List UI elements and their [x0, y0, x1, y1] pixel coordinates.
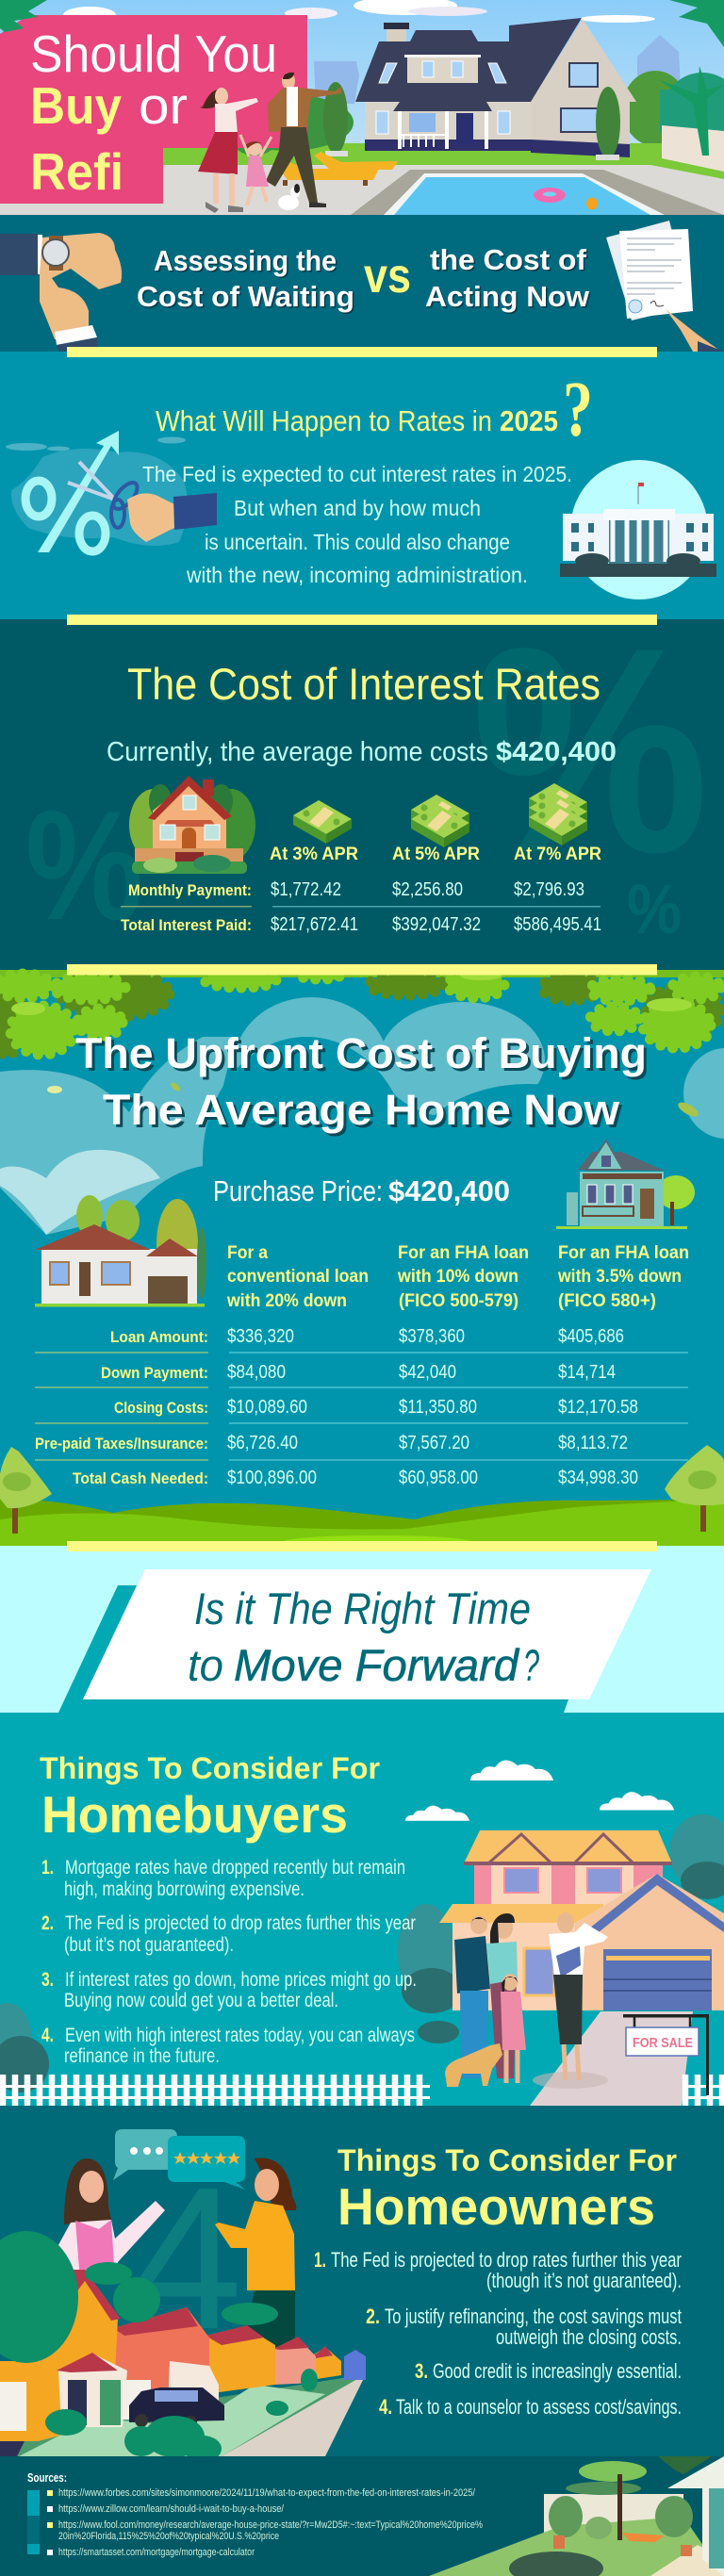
- list: homeowner points: [314, 2248, 682, 2419]
- watermark: percent signs: [25, 586, 709, 952]
- table values: $378,360: [399, 1326, 465, 1347]
- section: sources: [0, 2456, 724, 2576]
- table values: $6,726.40: [227, 1433, 298, 1453]
- heading: homebuyers: Homebuyers: [41, 1785, 348, 1844]
- house: [355, 18, 636, 157]
- loungers: [273, 152, 398, 186]
- list: homebuyer points: 1.: [41, 1857, 54, 1879]
- row labels: Pre-paid Taxes/Insurance:: [35, 1435, 208, 1452]
- table values: $8,113.72: [558, 1433, 628, 1453]
- banner panel: [83, 1569, 651, 1699]
- heading: the cost of acting now: Acting Now: [425, 280, 590, 313]
- source links: [58, 2487, 483, 2558]
- subheading: average home cost: Currently, the average home costs: [107, 737, 488, 767]
- list: homebuyer points: [41, 1857, 417, 2067]
- table: upfront cost: [35, 1243, 689, 1488]
- title text: Should You: Should You: [30, 25, 277, 83]
- section: hero scene: [0, 0, 724, 215]
- icon: hand with watch: [0, 233, 122, 352]
- icon: blue two-storey house: [556, 1140, 695, 1229]
- heading: the upfront cost: The Upfront Cost of Buying: [78, 1032, 650, 1080]
- title text: Buy: Buy: [30, 76, 122, 135]
- car: [129, 2387, 224, 2429]
- heading: the upfront cost: The Average Home Now: [103, 1086, 620, 1134]
- list: homebuyer points: If interest rates go down, home prices might go up.: [65, 1969, 417, 1991]
- list: homebuyer points: The Fed is projected to drop rates further this year: [65, 1912, 416, 1934]
- row labels: Closing Costs:: [114, 1399, 208, 1417]
- list: homeowner points: 4.: [379, 2395, 392, 2419]
- table headers: At 7% APR: [514, 845, 601, 864]
- row: total interest paid: Total Interest Paid:: [121, 916, 252, 934]
- icon: house with trees: [129, 776, 255, 874]
- family and agent: [445, 1912, 608, 2089]
- subheading: purchase price: [213, 1174, 510, 1207]
- fence: [0, 2075, 724, 2106]
- table values: [227, 1326, 638, 1488]
- list: homebuyer points: refinance in the future.: [64, 2045, 220, 2067]
- decorative side bar: [27, 2490, 40, 2554]
- section: homebuyers: [0, 1713, 724, 2106]
- heading: things to consider: Things To Consider For: [337, 2143, 677, 2177]
- list: homebuyer points: (but it’s not guaranteed).: [64, 1934, 234, 1956]
- section: upfront cost of buying: [0, 970, 724, 1549]
- list: homeowner points: 3.: [415, 2359, 428, 2383]
- icon: signed documents: [606, 221, 724, 352]
- table headers: [270, 845, 601, 864]
- banner text: [188, 1583, 539, 1690]
- heading: the upfront cost: [75, 1029, 650, 1137]
- table values: $10,089.60: [227, 1397, 307, 1418]
- heading: assessing the: Assessing the: [154, 244, 337, 277]
- source links: https://smartasset.com/mortgage/mortgage-calculator: [58, 2547, 255, 2558]
- heading: the cost of acting now: Acting Now: [426, 281, 591, 315]
- heading: the cost of acting now: the Cost of: [430, 243, 587, 276]
- list: homebuyer points: high, making borrowing expensive.: [64, 1879, 304, 1900]
- list: homeowner points: 1.: [314, 2248, 326, 2272]
- heading: the cost of acting now: the Cost of: [432, 245, 588, 277]
- table values: $84,080: [227, 1362, 286, 1383]
- column headers: For an FHA loan: [558, 1243, 689, 1263]
- column headers: [226, 1243, 689, 1311]
- title text: Refi: Refi: [30, 142, 123, 201]
- heading: assessing the: Cost of Waiting: [137, 280, 354, 313]
- column headers: conventional loan: [227, 1267, 369, 1287]
- table headers: At 5% APR: [392, 845, 480, 864]
- watermark: percent signs: %: [627, 870, 682, 948]
- watermark: number 4: 4: [132, 2144, 242, 2371]
- for sale sign: [623, 2014, 709, 2095]
- near houses: [0, 2270, 219, 2441]
- source bullets: [47, 2490, 53, 2555]
- list: homebuyer points: 4.: [41, 2025, 54, 2046]
- table values: $405,686: [558, 1326, 624, 1347]
- section: homeowners: [0, 2106, 724, 2462]
- row labels: [35, 1328, 208, 1487]
- column headers: (FICO 580+): [558, 1291, 656, 1311]
- banner text: to: [188, 1640, 223, 1690]
- watermark: percent signs: %: [471, 586, 709, 913]
- body text: rates paragraph: [142, 462, 572, 587]
- list: homeowner points: 2.: [366, 2305, 380, 2328]
- row: monthly payment: [128, 879, 584, 900]
- section: what will happen to rates: [0, 352, 724, 619]
- palm leaves: [0, 0, 724, 156]
- bushes: [0, 1814, 724, 2092]
- illustration: for sale house: [439, 1830, 724, 2106]
- icon: white house with garage: [35, 1195, 206, 1306]
- pink title panel: [0, 15, 307, 204]
- heading: things to consider: Things To Consider For: [40, 1751, 380, 1785]
- body text: rates paragraph: But when and by how much: [234, 496, 481, 520]
- subheading: purchase price: $420,400: [388, 1174, 510, 1207]
- for sale sign: FOR SALE: [633, 2035, 693, 2051]
- banner shadow shape: [58, 1585, 568, 1713]
- table values: $7,567.20: [399, 1433, 469, 1453]
- table: interest rate comparison: [121, 845, 601, 935]
- banner text: ?: [523, 1640, 539, 1690]
- row labels: Loan Amount:: [110, 1328, 208, 1346]
- subheading: purchase price: Purchase Price:: [213, 1174, 383, 1207]
- heading: the upfront cost: The Upfront Cost of Buying: [75, 1029, 647, 1077]
- row: total interest paid: $392,047.32: [392, 914, 481, 935]
- table headers: At 3% APR: [270, 845, 358, 864]
- body text: rates paragraph: with the new, incoming administration.: [186, 563, 528, 587]
- heading: what will happen to rates: What Will Happen to Rates in: [156, 404, 492, 437]
- illustration: percent arrow and scissors: [6, 431, 217, 552]
- heading: homeowners: Homeowners: [337, 2177, 655, 2236]
- section: cost of interest rates: [0, 586, 724, 970]
- list: homebuyer points: 3.: [41, 1969, 54, 1991]
- table values: $11,350.80: [399, 1397, 477, 1418]
- title text: or: or: [139, 76, 188, 135]
- source links: https://www.zillow.com/learn/should-i-wait-to-buy-a-house/: [58, 2503, 285, 2515]
- list: homebuyer points: 2.: [41, 1912, 54, 1934]
- tree canopy: [0, 970, 724, 1119]
- distant houses: [206, 2325, 366, 2394]
- row: monthly payment: Monthly Payment:: [128, 881, 252, 899]
- column headers: with 3.5% down: [557, 1267, 682, 1287]
- table values: $42,040: [399, 1362, 456, 1383]
- heading: the upfront cost: The Average Home Now: [106, 1089, 623, 1137]
- heading: assessing the: Cost of Waiting: [138, 281, 356, 315]
- row: monthly payment: $2,256.80: [392, 879, 463, 900]
- row: total interest paid: $217,672.41: [271, 914, 358, 935]
- heading: the cost of acting now: [425, 243, 591, 315]
- source links: 20in%20Florida,115%25%20of%20typical%20U.S.%20price: [58, 2531, 279, 2542]
- heading: what will happen to rates: 2025: [500, 404, 558, 437]
- heading: the cost of interest rates: The Cost of Interest Rates: [127, 659, 601, 709]
- illustration: street of houses: [0, 2231, 366, 2462]
- source links: https://www.fool.com/money/research/average-house-price-state/?r=Mw2D5#:~:text=Typical%20home%20price%: [58, 2519, 483, 2531]
- section: band assessing the cost: [0, 215, 724, 352]
- pool: [351, 170, 724, 215]
- body text: rates paragraph: is uncertain. This could also change: [205, 530, 510, 554]
- column headers: with 20% down: [226, 1291, 347, 1311]
- row labels: Total Cash Needed:: [73, 1469, 208, 1487]
- clouds: [405, 1760, 674, 1821]
- illustration: two women talking: [49, 2158, 297, 2347]
- list: homebuyer points: Buying now could get you a better deal.: [64, 1990, 338, 2011]
- list: homebuyer points: Even with high interest rates today, you can always: [65, 2025, 415, 2046]
- row: monthly payment: $2,796.93: [514, 879, 584, 900]
- row: monthly payment: $1,772.42: [271, 879, 341, 900]
- subheading: average home cost: $420,400: [496, 737, 617, 767]
- hills and trees: [0, 1445, 724, 1549]
- illustration: backyard garden: [429, 2456, 724, 2576]
- label: vs: vs: [364, 249, 411, 304]
- background clouds: [0, 997, 724, 1282]
- family illustration: [198, 73, 341, 213]
- row labels: Down Payment:: [101, 1364, 208, 1382]
- column headers: (FICO 500-579): [399, 1291, 518, 1311]
- list: homebuyer points: Mortgage rates have dropped recently but remain: [65, 1857, 405, 1879]
- icon: question mark: ?: [563, 366, 593, 453]
- table values: $12,170.58: [558, 1397, 638, 1418]
- row: total interest paid: [121, 914, 601, 935]
- table values: $34,998.30: [558, 1468, 638, 1488]
- column headers: with 10% down: [397, 1267, 518, 1287]
- heading: sources: Sources:: [27, 2470, 67, 2485]
- table values: $336,320: [227, 1326, 294, 1347]
- body text: rates paragraph: The Fed is expected to cut interest rates in 2025.: [142, 462, 572, 486]
- table values: $14,714: [558, 1362, 616, 1383]
- banner text: Is it The Right Time: [194, 1583, 531, 1633]
- heading: assessing the: [137, 244, 356, 315]
- icon: money stacks: [293, 783, 587, 847]
- heading: assessing the: Assessing the: [155, 245, 337, 279]
- row: total interest paid: $586,495.41: [514, 914, 601, 935]
- source links: https://www.forbes.com/sites/simonmoore/2024/11/19/what-to-expect-from-the-fed-on-interest-rates-in-2025/: [58, 2487, 476, 2499]
- banner text: Move Forward: [234, 1640, 520, 1690]
- column headers: For a: [227, 1243, 268, 1263]
- trees and bushes: [0, 2231, 318, 2462]
- illustration: white house: [560, 460, 716, 599]
- yellow divider bars: [67, 347, 657, 1551]
- table values: $60,958.00: [399, 1468, 478, 1488]
- table values: $100,896.00: [227, 1468, 317, 1488]
- section: right time banner: [0, 1546, 724, 1713]
- watermark: percent signs: %: [25, 779, 143, 952]
- speech bubbles: [113, 2129, 245, 2190]
- column headers: For an FHA loan: [398, 1243, 529, 1263]
